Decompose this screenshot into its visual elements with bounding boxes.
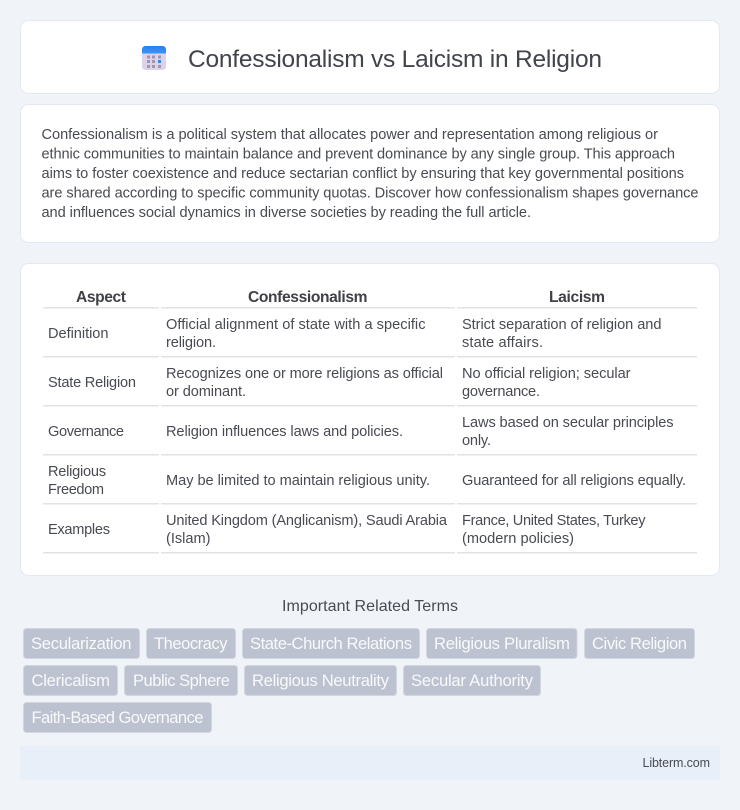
tag: Religious Neutrality: Religious Neutrality <box>252 671 390 690</box>
table row: Examples: France, United States, Turkey <box>462 513 646 529</box>
table row: Governance: Laws based on secular principles <box>462 415 674 431</box>
table row: Religious Freedom <box>43 464 697 504</box>
table row: Religious Freedom: Guaranteed for all religions equally. <box>462 473 686 489</box>
table row: Governance <box>43 415 697 456</box>
table row: Religious Freedom: May be limited to maintain religious unity. <box>166 473 430 489</box>
text block: introduction paragraph <box>42 127 698 221</box>
table header row <box>43 289 697 308</box>
tag: Civic Religion <box>584 628 694 658</box>
title: Confessionalism vs Laicism in Religion <box>188 46 602 73</box>
tag: Theocracy: Theocracy <box>154 634 228 653</box>
table row: Governance: only. <box>462 433 491 449</box>
text block: introduction paragraph: and influences social dynamics in diverse societies by reading the full article. <box>42 205 531 221</box>
table row: Definition: Strict separation of religion and <box>462 317 662 333</box>
tag: Secular Authority: Secular Authority <box>411 671 534 690</box>
table row: Definition: state affairs. <box>462 335 543 351</box>
tag: Clericalism <box>24 666 118 696</box>
tag: State-Church Relations <box>242 628 420 658</box>
tag: Secularization <box>24 628 140 658</box>
table row: State Religion <box>43 366 697 406</box>
table row: Definition <box>43 317 697 358</box>
tag: Civic Religion: Civic Religion <box>592 634 687 653</box>
heading: important related terms: Important Related Terms <box>282 598 458 615</box>
tag: Theocracy <box>146 628 236 658</box>
tag: Religious Pluralism: Religious Pluralism <box>434 634 570 653</box>
panel: header <box>20 20 720 94</box>
panel: related term tags <box>24 628 694 732</box>
table row: Religious Freedom: Religious <box>48 464 106 480</box>
table header row: Confessionalism <box>248 289 368 306</box>
table row: Definition: Definition <box>48 326 108 342</box>
table header row: Aspect <box>76 289 126 306</box>
footer: Libterm.com <box>642 756 710 770</box>
table row: Definition: Official alignment of state with a specific <box>166 317 426 333</box>
table row: Governance: Governance <box>48 424 124 440</box>
tag: Religious Neutrality <box>244 666 396 696</box>
tag: Public Sphere: Public Sphere <box>133 671 230 690</box>
tag: Clericalism: Clericalism <box>32 671 110 690</box>
table row: State Religion: or dominant. <box>166 384 246 400</box>
table row: Examples <box>43 513 697 554</box>
table row: Examples: (Islam) <box>166 531 210 547</box>
table row: Examples: United Kingdom (Anglicanism), Saudi Arabia <box>166 513 448 529</box>
table row: State Religion: governance. <box>462 384 540 400</box>
panel: introduction <box>20 104 720 242</box>
table row: Examples: Examples <box>48 522 110 538</box>
tag: Faith-Based Governance <box>24 702 212 732</box>
tag: State-Church Relations: State-Church Relations <box>250 634 412 653</box>
table row: Examples: (modern policies) <box>462 531 574 547</box>
icon: calendar <box>142 46 166 70</box>
table row: Governance: Religion influences laws and policies. <box>166 424 403 440</box>
footer <box>20 746 720 780</box>
tag: Religious Pluralism <box>426 628 577 658</box>
table row: Religious Freedom: Freedom <box>48 482 104 498</box>
table row: State Religion: Recognizes one or more religions as official <box>166 366 443 382</box>
table header row: Laicism <box>549 289 605 306</box>
text block: introduction paragraph: ethnic communities to maintain balance and prevent dominance by any single group. This approach <box>42 146 675 162</box>
tag: Secularization: Secularization <box>31 634 132 653</box>
text block: introduction paragraph: are shared according to specific community quotas. Discover how confessionalism shapes governance <box>42 186 698 202</box>
tag: Faith-Based Governance: Faith-Based Governance <box>32 708 204 727</box>
text block: introduction paragraph: Confessionalism is a political system that allocates power and representation among religious or <box>42 127 658 143</box>
panel: comparison table <box>20 264 720 576</box>
tag: Secular Authority <box>404 666 540 696</box>
text block: introduction paragraph: aims to foster coexistence and reduce sectarian conflict by ensuring that key governmental positions <box>42 166 684 182</box>
table row: Definition: religion. <box>166 335 216 351</box>
tag: Public Sphere <box>124 666 238 696</box>
table row: State Religion: State Religion <box>48 375 136 391</box>
table row: State Religion: No official religion; secular <box>462 366 631 382</box>
